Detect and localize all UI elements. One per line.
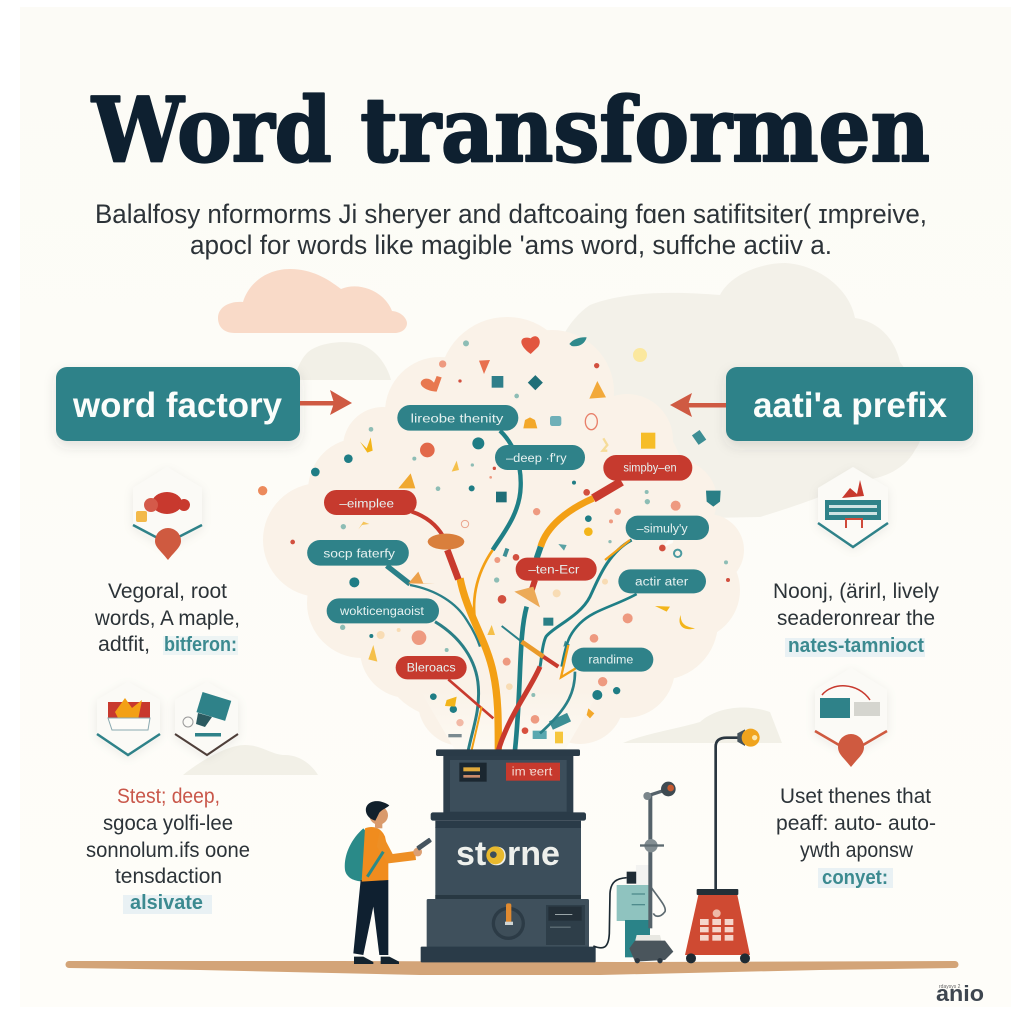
- banner: word factory: word factory: [72, 386, 283, 425]
- pill: bleroacs: [396, 656, 467, 679]
- subtitle: [95, 199, 927, 260]
- text: root words: [94, 580, 240, 656]
- banner: word factory: [56, 367, 300, 441]
- text: uset thenes: ywth aponsw: [800, 839, 914, 862]
- icon: hexagon right top: [818, 467, 888, 547]
- pill: eimplee: –eimplee: [339, 497, 394, 511]
- central word cloud: [263, 317, 744, 750]
- icon: hexagon left lower 2: [175, 682, 238, 755]
- machine name: storne: [456, 835, 560, 873]
- pill: ten-ecr: –ten-Ecr: [528, 563, 579, 577]
- word tree illustration: [258, 336, 730, 750]
- machine and figures: [345, 729, 760, 964]
- text: noonj: [773, 580, 939, 657]
- text: stest deep: sonnolum.ifs oone: [86, 839, 250, 862]
- pill: lireobe thenity: lireobe thenity: [411, 412, 504, 426]
- text: noonj: seaderonrear the: [777, 607, 935, 630]
- text: noonj: nates-tamnioct: [788, 635, 924, 657]
- arrow: right banner to centre: [670, 393, 726, 417]
- dial: [492, 903, 525, 940]
- pill: deep fry: –deep ·f'ry: [506, 451, 568, 465]
- pill: bleroacs: Bleroacs: [407, 661, 456, 675]
- text: uset thenes: peaff: auto- auto-: [776, 812, 936, 835]
- text: stest deep: tensdaction: [115, 865, 222, 888]
- pill: actir ater: actir ater: [635, 574, 688, 588]
- pill: simply: –simuly'y: [637, 521, 689, 535]
- text: root words: words, A maple,: [94, 607, 240, 630]
- word pills: [307, 405, 709, 679]
- title: Word transformen: [91, 79, 930, 183]
- banner: prefix: aati'a prefix: [753, 386, 948, 425]
- ground line: [66, 961, 958, 975]
- lamp stand: [685, 729, 760, 963]
- text: stest deep: Stest; deep,: [117, 785, 220, 808]
- cloud: grey left: [293, 342, 391, 380]
- pill: wokticengaoist: wokticengaoist: [339, 604, 425, 618]
- icon: hexagon left lower 1: [97, 682, 160, 755]
- person with backpack: [345, 801, 432, 964]
- cloud: grey left small near hex: [183, 745, 318, 775]
- text: uset thenes: [776, 785, 936, 889]
- banner: prefix: [726, 367, 973, 441]
- label: insert: im ɐert: [512, 764, 553, 778]
- pill: lireobe thenity: [397, 405, 518, 431]
- display: [459, 763, 487, 782]
- logo: anio: [936, 981, 984, 1006]
- text: stest deep: sgoca yolfi-lee: [103, 812, 233, 835]
- icon: hexagon right lower: [815, 668, 887, 767]
- pill: socp faterfy: socp faterfy: [323, 546, 396, 560]
- text: root words: Vegoral, root: [108, 580, 227, 603]
- pill: socp faterfy: [307, 540, 409, 566]
- label: insert: [506, 763, 560, 781]
- arrow: left banner to centre: [300, 390, 352, 415]
- text: noonj: Noonj, (ärirl, lively: [773, 580, 939, 603]
- pill: deep fry: [495, 445, 585, 470]
- logo: rdaysys 2: [939, 984, 961, 990]
- pill: simpby-en: [603, 455, 692, 481]
- subtitle: apocl for words like magible 'ams word, suffche actiiv a.: [190, 230, 832, 260]
- vacuum machine: [593, 782, 676, 963]
- cloud: grey right small near lamp: [623, 707, 782, 743]
- pill: randime: randime: [588, 653, 633, 667]
- text: uset thenes: conyet:: [822, 867, 888, 889]
- text: stest deep: alsivate: [130, 892, 203, 914]
- branching connector lines: [387, 431, 637, 750]
- drawer panel: [546, 905, 585, 945]
- pill: ten-ecr: [516, 558, 597, 581]
- icon: hexagon left top: [133, 467, 202, 560]
- machine: storne: [421, 749, 596, 962]
- text: root words: bitferon:: [164, 634, 237, 656]
- cloud: large grey right: [540, 263, 923, 520]
- pill: actir ater: [618, 569, 706, 593]
- pill: eimplee: [324, 490, 417, 515]
- cloud: salmon: [218, 269, 407, 333]
- subtitle: Balalfosy nformorms Ji sheryer and daftcoaing fɑen satifitsiter( ɪmpreive,: [95, 199, 927, 229]
- text: stest deep: [86, 785, 250, 914]
- text: uset thenes: Uset thenes that: [780, 785, 931, 808]
- pill: wokticengaoist: [327, 598, 439, 623]
- text: root words: adtfit,: [98, 633, 150, 656]
- pill: simply: [626, 516, 709, 540]
- confetti shapes: [258, 336, 730, 743]
- pill: randime: [572, 648, 653, 672]
- pill: simpby-en: simpby–en: [623, 461, 677, 475]
